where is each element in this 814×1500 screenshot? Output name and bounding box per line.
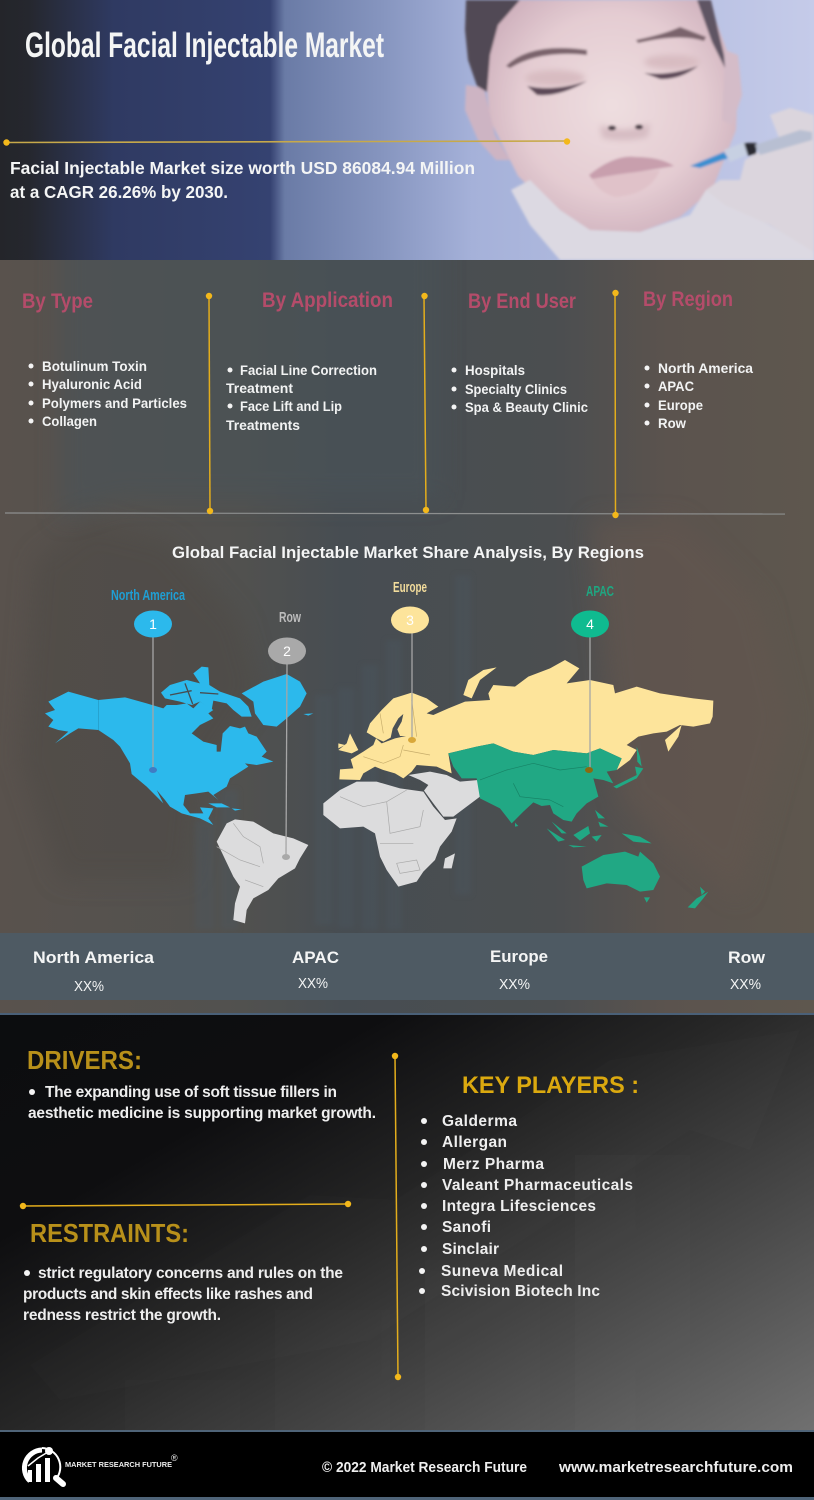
list: Hospitals bbox=[465, 362, 525, 378]
list: Specialty Clinics bbox=[465, 381, 567, 397]
list: Treatment bbox=[226, 380, 293, 396]
panel: drivers bbox=[27, 1045, 376, 1122]
map pin 2: Row bbox=[268, 609, 306, 860]
share: APAC: XX% bbox=[298, 975, 328, 992]
share: Europe bbox=[490, 947, 548, 993]
panel: header banner bbox=[0, 0, 814, 260]
restraint text: products and skin effects like rashes and bbox=[23, 1286, 313, 1303]
list of companies: Sanofi bbox=[442, 1219, 491, 1236]
map pin 4: APAC: 4 bbox=[586, 616, 594, 632]
list: Europe bbox=[658, 397, 703, 413]
map region: Asia Pacific bbox=[448, 743, 708, 908]
map heading: Global Facial Injectable Market Share Analysis, By Regions bbox=[172, 543, 644, 562]
list: Face Lift and Lip bbox=[240, 398, 342, 414]
world map bbox=[45, 660, 713, 923]
list bbox=[28, 358, 187, 429]
list bbox=[226, 362, 377, 433]
share: APAC bbox=[292, 948, 339, 992]
list: Collagen bbox=[42, 413, 97, 429]
list of companies: Sinclair bbox=[442, 1241, 499, 1258]
map pin 2: Row: Row bbox=[279, 609, 301, 626]
list: Hyaluronic Acid bbox=[42, 376, 142, 392]
list bbox=[452, 362, 588, 415]
heading: By End User bbox=[468, 290, 576, 313]
share: North America: XX% bbox=[74, 978, 104, 995]
map region: Africa and Middle East bbox=[323, 772, 480, 887]
logo bbox=[24, 1447, 178, 1484]
restraint text: strict regulatory concerns and rules on the bbox=[38, 1265, 343, 1282]
map pin 1: North America: 1 bbox=[149, 616, 157, 632]
list of companies: Suneva Medical bbox=[441, 1263, 563, 1280]
list: Polymers and Particles bbox=[42, 395, 187, 411]
map pin 3: Europe bbox=[391, 579, 429, 743]
panel: by region bbox=[643, 288, 753, 431]
share: North America bbox=[33, 948, 155, 995]
share band bbox=[0, 933, 814, 1015]
list: Treatments bbox=[226, 417, 300, 433]
map pin 4: APAC bbox=[571, 583, 614, 773]
list of companies: Scivision Biotech Inc bbox=[441, 1283, 600, 1300]
website: www.marketresearchfuture.com bbox=[558, 1459, 793, 1476]
list of companies: Allergan bbox=[442, 1134, 507, 1151]
market size statement bbox=[10, 158, 475, 202]
list: Botulinum Toxin bbox=[42, 358, 147, 374]
map pin 4: APAC: APAC bbox=[586, 583, 614, 600]
list: Spa & Beauty Clinic bbox=[465, 399, 588, 415]
share: APAC: APAC bbox=[292, 948, 339, 967]
column dividers with gold dots bbox=[5, 290, 785, 518]
list of companies: Merz Pharma bbox=[443, 1156, 544, 1173]
driver text: The expanding use of soft tissue fillers in bbox=[45, 1084, 337, 1101]
map pin 3: Europe: 3 bbox=[406, 612, 414, 628]
list: Facial Line Correction bbox=[240, 362, 377, 378]
horizontal gold divider bbox=[20, 1201, 351, 1209]
list: Row bbox=[658, 415, 686, 431]
list of companies: Integra Lifesciences bbox=[442, 1198, 596, 1215]
heading: By Region bbox=[643, 288, 733, 311]
driver text bbox=[28, 1084, 376, 1122]
panel: by end user bbox=[452, 290, 588, 415]
panel: key players bbox=[419, 1072, 639, 1300]
restraint text: redness restrict the growth. bbox=[23, 1307, 221, 1324]
logo: ® bbox=[171, 1453, 178, 1463]
list: APAC bbox=[658, 378, 694, 394]
map region: North America bbox=[45, 667, 313, 825]
list of companies: Galderma bbox=[442, 1113, 517, 1130]
panel: restraints bbox=[23, 1218, 343, 1324]
share: Row bbox=[728, 948, 766, 993]
heading: DRIVERS: bbox=[27, 1045, 142, 1075]
map pin 1: North America bbox=[111, 587, 185, 773]
heading: By Application bbox=[262, 289, 393, 312]
map pin 1: North America: North America bbox=[111, 587, 185, 604]
panel: by application bbox=[226, 289, 393, 433]
restraint text bbox=[23, 1265, 343, 1324]
logo: MARKET RESEARCH FUTURE bbox=[65, 1460, 172, 1469]
panel: drivers, restraints and key players background bbox=[0, 1015, 814, 1430]
heading: RESTRAINTS: bbox=[30, 1218, 189, 1248]
market size statement: Facial Injectable Market size worth USD 86084.94 Million bbox=[10, 158, 475, 178]
map region: South America bbox=[217, 819, 308, 923]
list bbox=[644, 360, 753, 431]
panel: segmentation and map background bbox=[0, 230, 814, 1013]
panel: by type bbox=[22, 290, 187, 429]
map pin 3: Europe: Europe bbox=[393, 579, 427, 596]
share: Row: Row bbox=[728, 948, 766, 967]
list: North America bbox=[658, 360, 753, 376]
photo: woman receiving facial injection bbox=[465, 0, 814, 260]
title: Global Facial Injectable Market bbox=[25, 26, 384, 65]
driver text: aesthetic medicine is supporting market growth. bbox=[28, 1105, 376, 1122]
share: Europe: Europe bbox=[490, 947, 548, 966]
footer bbox=[0, 1430, 814, 1500]
heading: By Type bbox=[22, 290, 93, 313]
map region: Europe and Russia bbox=[338, 660, 713, 780]
heading: KEY PLAYERS : bbox=[462, 1072, 639, 1099]
vertical gold divider bbox=[392, 1053, 401, 1380]
icon: chart in magnifier bbox=[24, 1447, 63, 1484]
share: Row: XX% bbox=[730, 976, 761, 993]
list of companies bbox=[419, 1113, 633, 1300]
market size statement: at a CAGR 26.26% by 2030. bbox=[10, 182, 228, 202]
share: North America: North America bbox=[33, 948, 155, 967]
list of companies: Valeant Pharmaceuticals bbox=[442, 1177, 633, 1194]
share: Europe: XX% bbox=[499, 976, 530, 993]
map pin 2: Row: 2 bbox=[283, 643, 291, 659]
copyright: © 2022 Market Research Future bbox=[322, 1459, 527, 1476]
divider with gold end dots bbox=[3, 138, 570, 146]
